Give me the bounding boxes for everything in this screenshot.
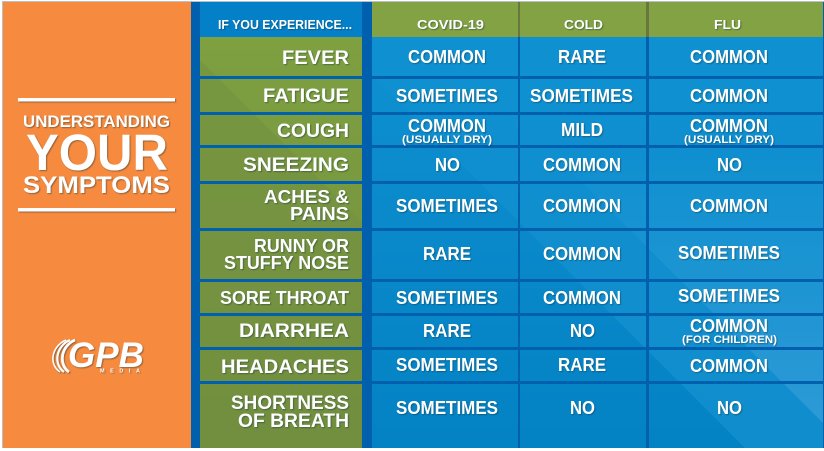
panel: orange sidebar — [3, 2, 191, 448]
column: COVID-19: SOMETIMES — [396, 398, 498, 418]
header: if you experience: IF YOU EXPERIENCE... — [218, 18, 352, 32]
column: Flu: COMMON — [690, 356, 768, 376]
column: COVID-19: RARE — [423, 321, 471, 341]
column: COVID-19: SOMETIMES — [396, 355, 498, 375]
column: COVID-19: RARE — [423, 244, 471, 264]
header: condition columns: COVID-19 — [417, 17, 484, 32]
grid lines — [372, 37, 823, 448]
header: condition columns: FLU — [714, 17, 741, 32]
panel: symptom rows: RUNNY OR — [254, 236, 349, 256]
panel: answer cells — [372, 37, 823, 448]
column: COVID-19: SOMETIMES — [396, 288, 498, 308]
row gaps — [200, 76, 362, 384]
header: condition columns — [372, 2, 823, 37]
panel: table background — [191, 2, 824, 448]
title: SYMPTOMS — [23, 172, 170, 199]
column: Flu — [678, 47, 780, 418]
panel: symptom rows: ACHES & — [264, 187, 349, 207]
column: COVID-19: SOMETIMES — [396, 86, 498, 106]
column: Cold: COMMON — [543, 196, 621, 216]
column: Cold — [530, 47, 633, 418]
column: Cold: MILD — [561, 120, 603, 140]
column: Flu: COMMON — [690, 196, 768, 216]
title: UNDERSTANDING — [23, 112, 170, 131]
panel: symptom rows: SHORTNESS — [231, 393, 349, 414]
column: Cold: RARE — [558, 47, 606, 67]
column: Flu: SOMETIMES — [678, 243, 780, 263]
header: condition columns: COLD — [564, 17, 603, 32]
column: Cold: NO — [570, 398, 595, 418]
panel: symptom rows: HEADACHES — [221, 357, 349, 378]
column: Cold: RARE — [558, 355, 606, 375]
icon: GPB Media logo: GPB — [68, 336, 144, 375]
column: COVID-19 — [396, 47, 498, 418]
panel: symptom rows: FATIGUE — [263, 86, 349, 107]
column: Cold: NO — [570, 321, 595, 341]
panel: symptom rows: OF BREATH — [238, 411, 349, 432]
column: COVID-19: NO — [435, 155, 460, 175]
column: Cold: COMMON — [543, 155, 621, 175]
column: COVID-19: SOMETIMES — [396, 196, 498, 216]
column: COVID-19: COMMON — [408, 47, 486, 67]
header: if you experience — [200, 2, 362, 37]
column: COVID-19: (USUALLY DRY) — [402, 134, 492, 146]
column: Flu: COMMON — [690, 86, 768, 106]
column: Cold: COMMON — [543, 244, 621, 264]
icon: GPB Media logo: MEDIA — [100, 368, 140, 374]
column: Cold: SOMETIMES — [530, 86, 633, 106]
column: Flu: (FOR CHILDREN) — [682, 334, 777, 346]
panel: symptom rows: COUGH — [277, 121, 349, 142]
panel: symptom rows: FEVER — [282, 48, 349, 69]
column: Flu: COMMON — [690, 316, 768, 336]
column: Flu: COMMON — [690, 116, 768, 136]
panel: symptom rows: SORE THROAT — [220, 288, 349, 308]
column: Flu: SOMETIMES — [678, 286, 780, 306]
panel: symptom rows: DIARRHEA — [239, 321, 349, 342]
column: Flu: NO — [717, 155, 742, 175]
column: Flu: (USUALLY DRY) — [684, 134, 774, 146]
column: Flu: NO — [717, 398, 742, 418]
title: YOUR — [26, 124, 168, 181]
column: Cold: COMMON — [543, 288, 621, 308]
column: Flu: COMMON — [690, 47, 768, 67]
column: COVID-19: COMMON — [408, 116, 486, 136]
panel: symptom rows: PAINS — [290, 204, 349, 224]
panel: symptom rows — [200, 37, 362, 448]
panel: symptom rows: SNEEZING — [243, 155, 349, 176]
title — [18, 98, 175, 212]
panel: symptom rows: STUFFY NOSE — [224, 253, 349, 273]
